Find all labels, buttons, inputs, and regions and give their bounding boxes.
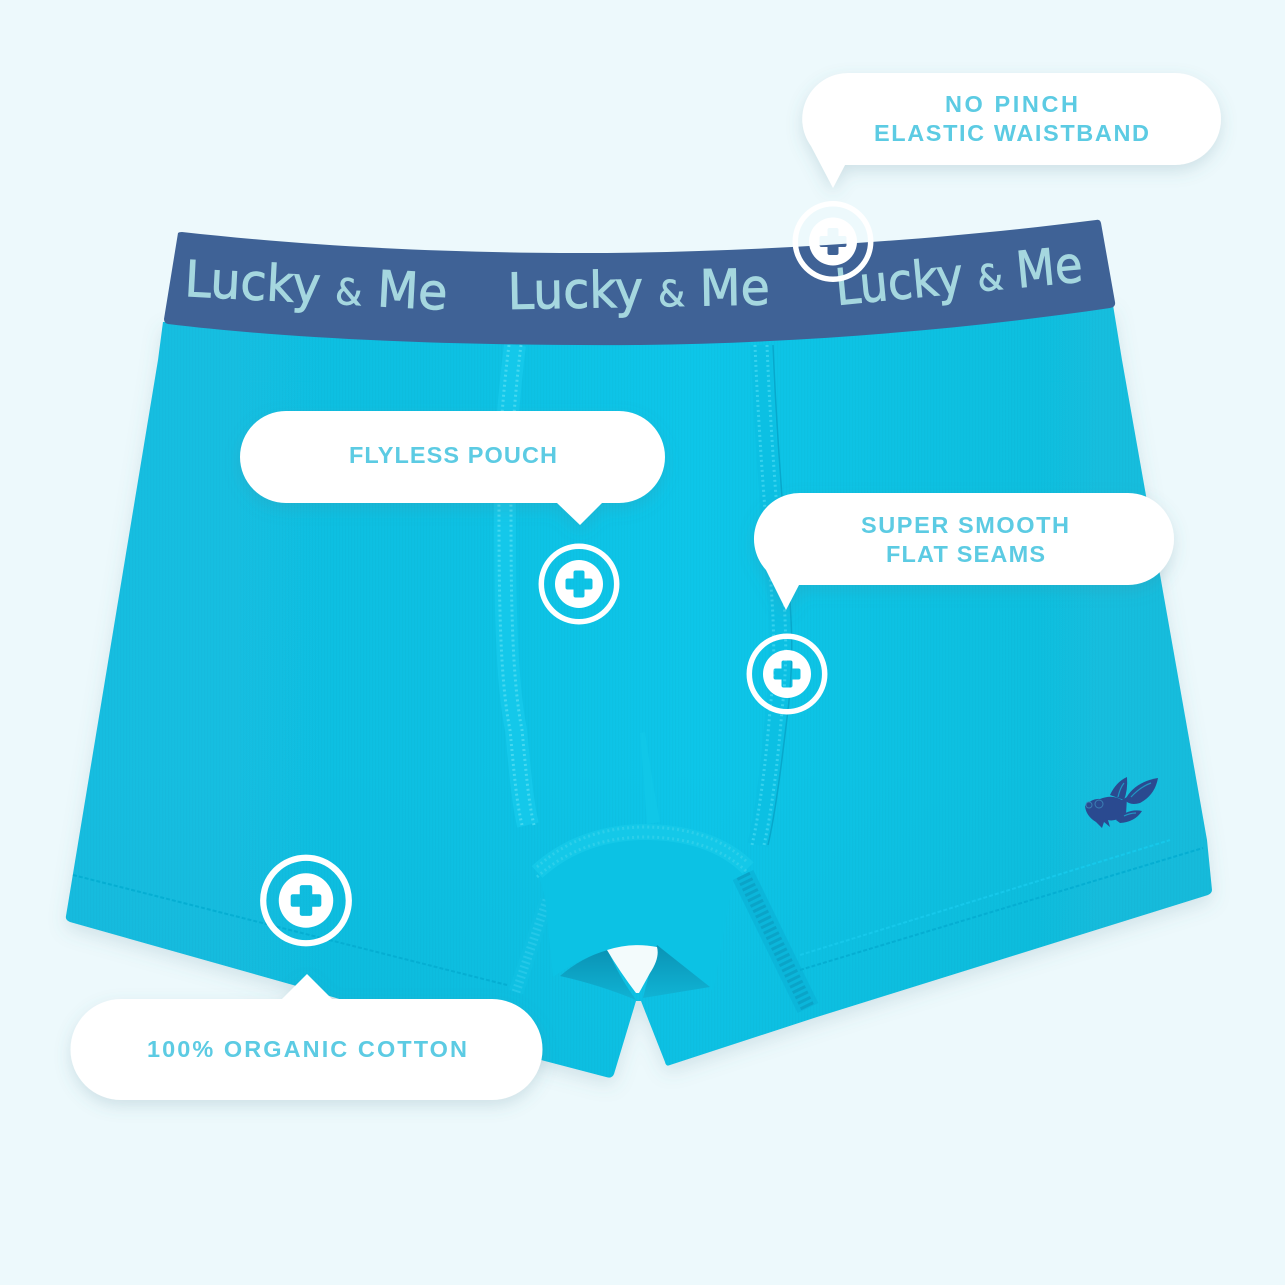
crotch panel — [537, 827, 750, 993]
icon: plus marker cotton — [263, 858, 349, 943]
callout: no pinch elastic waistband: ELASTIC WAISTBAND — [874, 120, 1149, 146]
leg opening shadow left — [560, 950, 636, 1000]
callout: flyless pouch: FLYLESS POUCH — [349, 442, 557, 468]
waistband logo right: Lucky & Me — [833, 235, 1085, 317]
callout: no pinch elastic waistband — [802, 73, 1221, 188]
callout: super smooth flat seams: SUPER SMOOTH — [861, 512, 1069, 538]
pouch fold — [640, 732, 660, 824]
hem stitching — [73, 840, 1203, 985]
callout: 100% organic cotton: 100% ORGANIC COTTON — [147, 1036, 467, 1062]
lower gusset seams — [516, 875, 808, 1008]
leg opening — [607, 945, 658, 993]
icon: plus marker pouch — [541, 546, 617, 622]
callout: no pinch elastic waistband: NO PINCH — [945, 91, 1078, 117]
boxer briefs garment — [66, 305, 1212, 1078]
callout: super smooth flat seams: FLAT SEAMS — [886, 541, 1045, 567]
right pouch seam — [752, 345, 792, 845]
icon: fish logo — [1085, 777, 1158, 828]
briefs body — [66, 305, 1212, 1078]
icon: plus marker waistband — [795, 204, 871, 279]
waistband — [164, 220, 1115, 345]
callout: 100% organic cotton — [70, 974, 542, 1100]
callout: flyless pouch — [240, 411, 665, 525]
leg opening shadow right — [643, 945, 710, 998]
left pouch seam — [499, 345, 534, 825]
waistband logo left: Lucky & Me — [183, 250, 449, 322]
callout: super smooth flat seams — [754, 493, 1174, 610]
waistband logo centre: Lucky & Me — [507, 258, 770, 321]
icon: plus marker seams — [749, 636, 825, 712]
crotch band seam — [537, 827, 748, 877]
